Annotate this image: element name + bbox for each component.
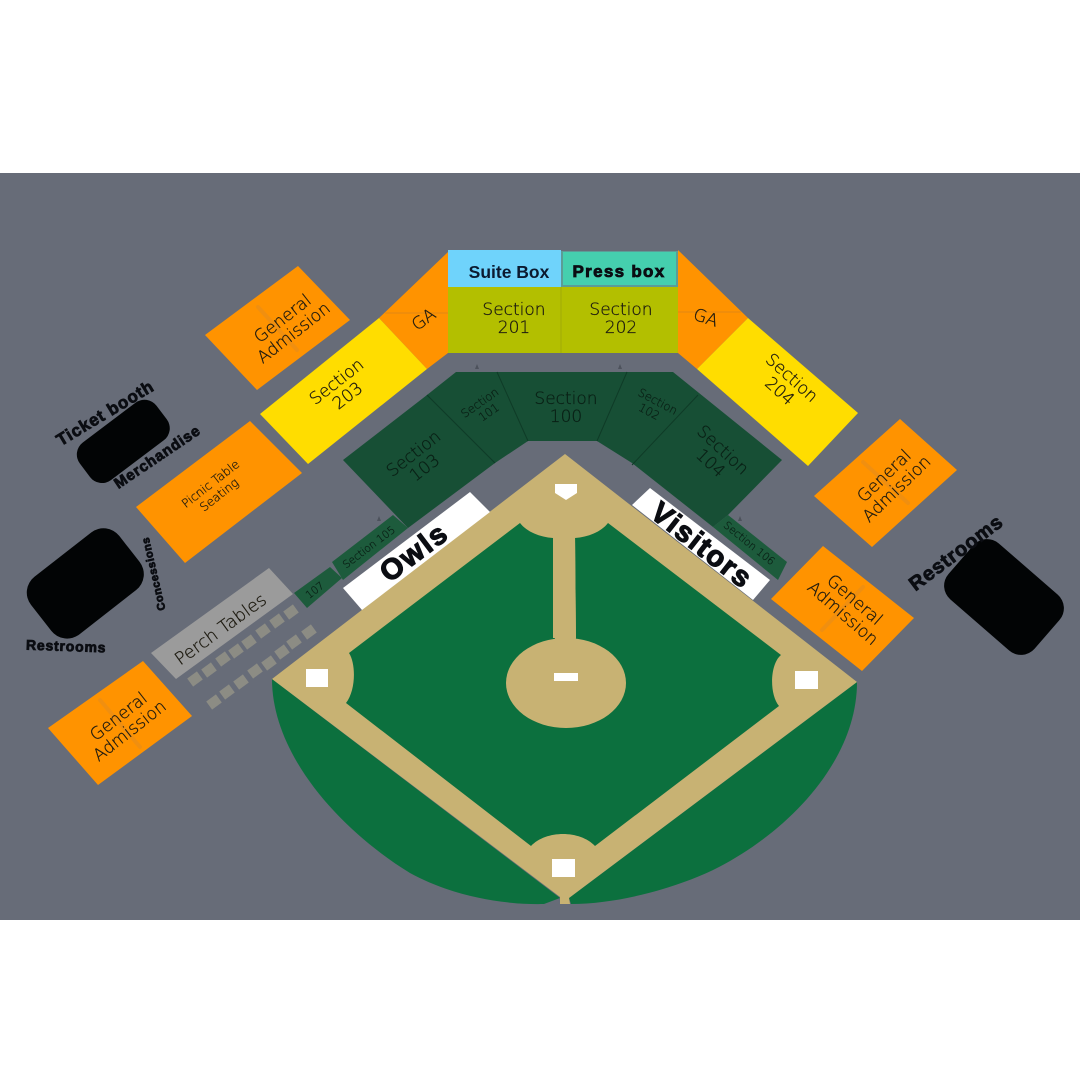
section 104 label: 104 [691,445,729,482]
infield dirt diamond [272,454,857,904]
press box: Press box [573,262,665,281]
section 202 [560,287,678,353]
press box [561,251,678,287]
infield grass [346,523,781,846]
section 202: Section [589,300,653,320]
ticket booth building [71,394,176,489]
pitcher's rubber [554,673,578,681]
section 100 label: Section [534,389,598,409]
GA left wedge [379,252,448,369]
outfield right foul territory [569,682,857,904]
section 106: Section 106 [721,519,777,568]
picnic table seating: Picnic Table [179,457,242,511]
concessions label: Concessions [140,536,168,612]
suite box [448,250,561,287]
baseball field [272,454,857,904]
section 107 [294,567,342,608]
section 203 [260,318,427,464]
picnic table seating: Seating [197,475,241,514]
section 201: Section [482,300,546,320]
general admission bottom left: Admission [90,697,170,766]
home plate [552,859,575,877]
section 100 label: 100 [550,407,582,427]
section dividers [427,372,698,465]
general admission bottom left: General [86,689,151,746]
section 103 label: 103 [406,450,444,486]
section 107: 107 [304,580,327,602]
general admission bottom left [48,661,192,785]
GA left wedge: GA [408,304,440,335]
section 102 label: Section [636,385,680,418]
section 102 label: 102 [636,400,662,423]
GA right wedge: GA [691,305,721,332]
pitcher's mound [506,638,626,728]
pitching lane [553,530,576,645]
section 105 [332,515,408,580]
lower seating bowl [343,372,782,528]
outfield left foul territory [272,679,560,904]
general admission right lower: Admission [803,578,882,650]
section 203: 203 [329,378,367,414]
first base [795,671,818,689]
GA right wedge [678,250,748,369]
general admission right upper: General [853,446,916,507]
Visitors dugout: Visitors [644,496,759,596]
Owls dugout [343,492,490,610]
picnic table seating [136,421,302,563]
section 101 label: Section [458,385,501,421]
section 204: 204 [761,373,798,410]
section 201: 201 [498,318,530,338]
second base [555,484,577,500]
section 105: Section 105 [341,524,398,571]
general admission right upper: Admission [859,452,935,527]
restrooms left label: Restrooms [26,637,107,655]
perch tables [151,568,293,679]
general admission right lower: General [822,571,886,630]
general admission top left [205,266,350,390]
aisle marker [377,364,742,521]
general admission right upper [814,419,957,547]
section 101 label: 101 [476,400,502,424]
section 202: 202 [605,318,637,338]
perch table seats [187,604,317,710]
section 103 label: Section [383,427,445,481]
section 204: Section [761,350,822,407]
panel: gray stadium background [0,173,1080,920]
Owls dugout: Owls [374,517,455,589]
section 104 label: Section [692,421,752,479]
restrooms right label: Restrooms [905,511,1008,596]
general admission top left: General [250,291,315,348]
section 204 [697,318,858,466]
general admission top left: Admission [254,299,334,368]
ticket booth label: Ticket booth [53,377,157,450]
perch tables: Perch Tables [171,590,271,670]
left restrooms building [19,520,152,647]
third base [306,669,328,687]
suite box: Suite Box [469,262,550,282]
section 201 [448,287,561,353]
section 203: Section [306,355,368,409]
bowl background [343,372,782,528]
right restrooms building [937,532,1071,662]
merchandise label: Merchandise [111,422,204,492]
section 106 [713,515,787,580]
general admission right lower [771,546,914,671]
